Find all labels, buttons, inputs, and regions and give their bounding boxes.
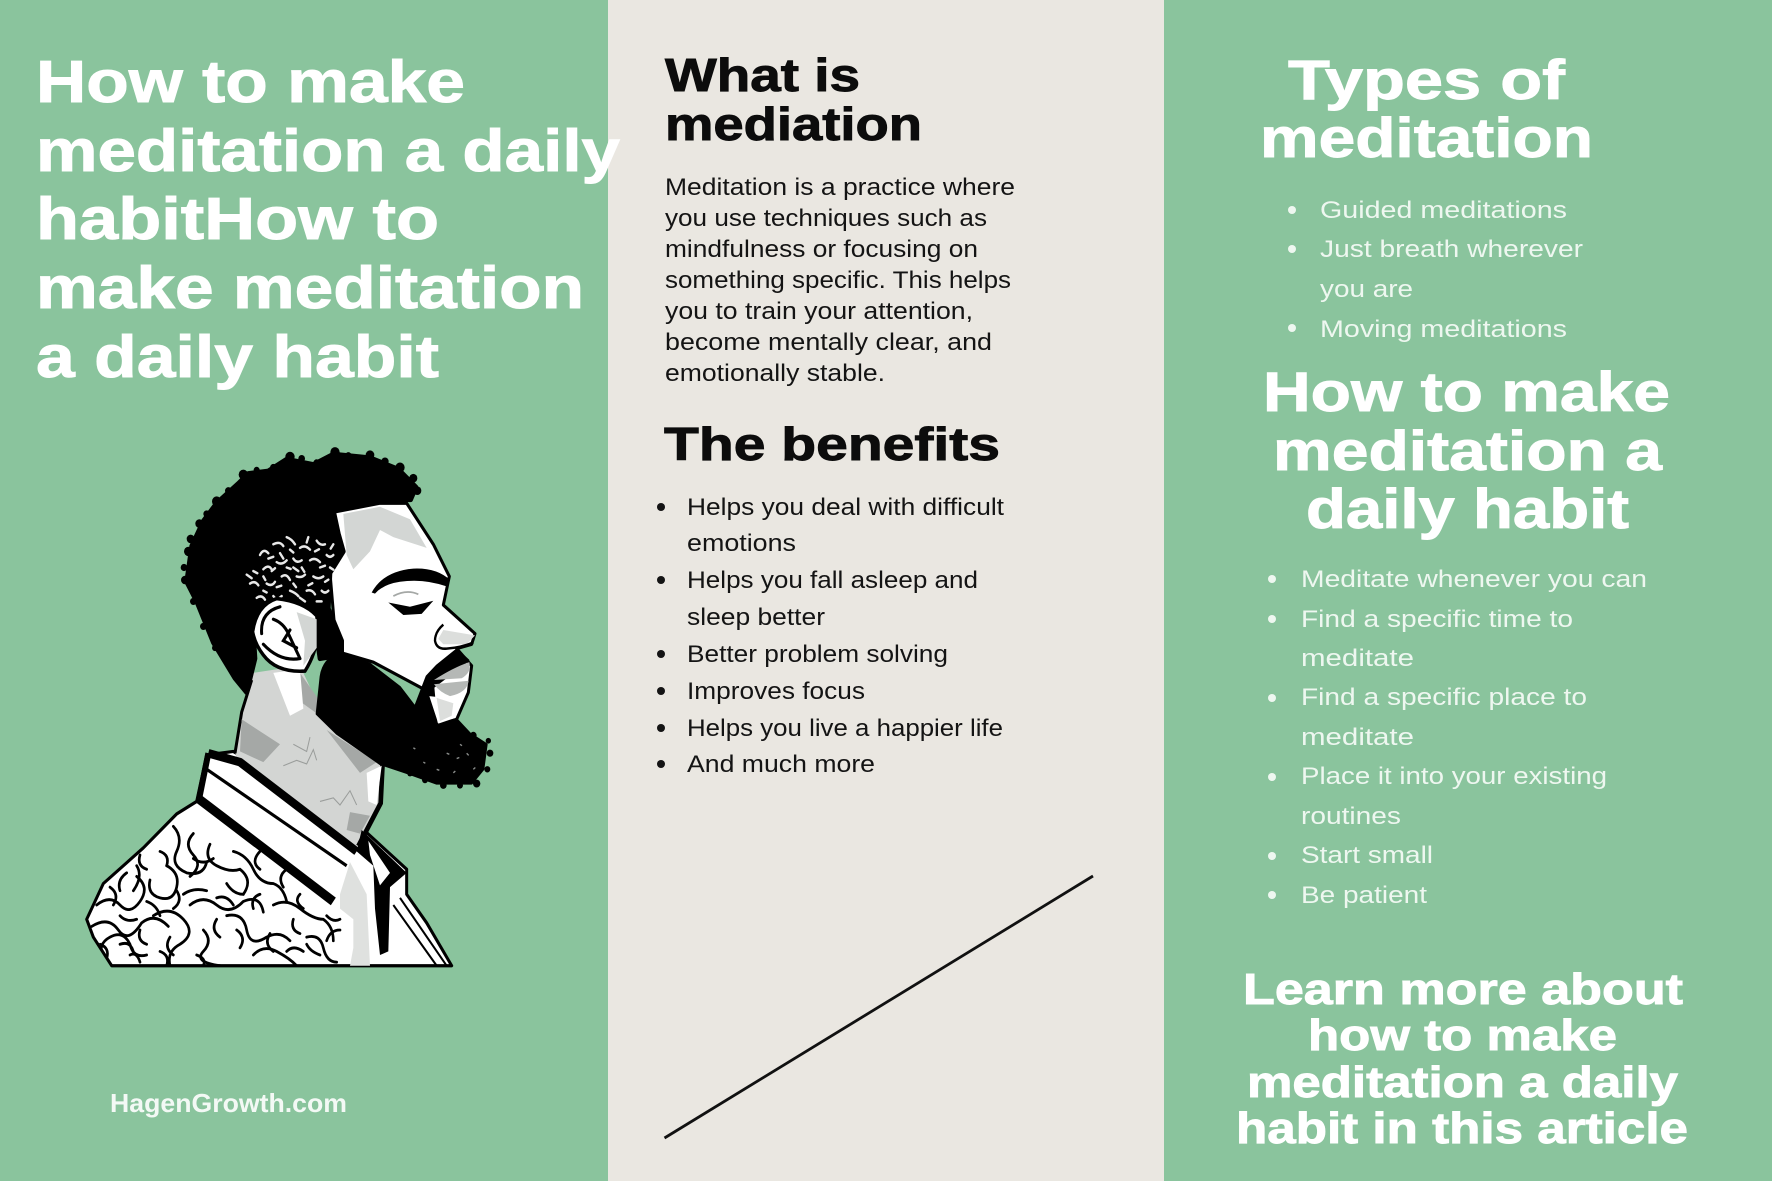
right shoulder lines (393, 898, 447, 966)
neck (235, 666, 382, 846)
heading: what is mediation: mediation (665, 98, 922, 150)
title: make meditation (36, 255, 584, 321)
ear shading (297, 612, 317, 666)
heading: what is mediation (665, 49, 922, 150)
shirt body (87, 751, 452, 966)
paragraph: what is meditation (665, 174, 1015, 387)
paragraph: what is meditation: become mentally clear, and (665, 329, 992, 356)
paragraph: what is meditation: emotionally stable. (665, 360, 885, 387)
title (36, 49, 620, 390)
paragraph: what is meditation: you use techniques such as (665, 205, 987, 232)
heading: types of meditation: meditation (1260, 106, 1593, 169)
list: how to make it a habit: Start small (1301, 842, 1433, 869)
list: types of meditation: Just breath wherever (1320, 236, 1583, 263)
call to action: meditation a daily (1247, 1058, 1679, 1107)
shirt pattern (92, 826, 340, 966)
title: habitHow to (36, 186, 439, 252)
list: how to make it a habit: routines (1301, 803, 1401, 830)
ear (253, 599, 318, 671)
chin patch (429, 695, 459, 724)
ear inner lines (262, 607, 300, 659)
collar outer stripe (198, 799, 333, 901)
heading: types of meditation: Types of (1288, 48, 1565, 111)
paragraph: what is meditation: mindfulness or focusing on (665, 236, 978, 263)
title: How to make (36, 49, 465, 115)
lips (434, 662, 470, 696)
beard texture (413, 744, 475, 773)
neck back outline (235, 680, 252, 753)
paragraph: what is meditation: something specific. This helps (665, 267, 1011, 294)
panel: centre cream background (608, 0, 1164, 1181)
list: benefits: Helps you fall asleep and (687, 567, 978, 594)
heading: how to make meditation a daily habit: How to make (1263, 360, 1670, 423)
list: how to make it a habit: meditate (1301, 724, 1414, 751)
list: how to make it a habit: Place it into your existing (1301, 763, 1607, 790)
chin shading (437, 698, 453, 721)
heading: the benefits: The benefits (664, 418, 1000, 470)
paragraph: what is meditation: you to train your attention, (665, 298, 973, 325)
forehead shading (343, 507, 427, 569)
title: meditation a daily (36, 118, 620, 184)
hair (187, 454, 416, 692)
list: types of meditation (1288, 197, 1583, 343)
list: benefits: And much more (687, 751, 875, 778)
call to action: how to make (1308, 1011, 1617, 1060)
diagonal line (664, 876, 1093, 1138)
list: benefits (657, 494, 1004, 778)
hair tufts (181, 447, 421, 651)
list: how to make it a habit: Meditate whenever you can (1301, 566, 1647, 593)
heading: what is mediation: What is (665, 49, 860, 101)
list: benefits: emotions (687, 530, 796, 557)
illustration: meditating man in profile (87, 447, 493, 966)
paragraph: what is meditation: Meditation is a practice where (665, 174, 1015, 201)
heading: how to make meditation a daily habit: daily habit (1306, 477, 1629, 540)
list: how to make it a habit: Be patient (1301, 882, 1427, 909)
placket dark band (357, 830, 407, 955)
collar thin stripe (207, 769, 347, 866)
list: how to make it a habit: Find a specific time to (1301, 606, 1573, 633)
collar tip white (368, 841, 390, 885)
nose shading (438, 630, 475, 644)
list: types of meditation: Moving meditations (1320, 316, 1567, 343)
closed eye (388, 601, 433, 615)
nose line (435, 625, 473, 649)
neck highlights (273, 669, 382, 805)
eyelid shading (393, 592, 418, 596)
neck fine lines (283, 737, 357, 805)
list: types of meditation: you are (1320, 276, 1413, 303)
list: how to make it a habit: Find a specific place to (1301, 684, 1587, 711)
list: how to make it a habit (1268, 566, 1647, 909)
collar left edge (199, 753, 208, 798)
panel: right green background (1164, 0, 1772, 1181)
shirt placket shade (340, 862, 370, 966)
beard tufts (407, 732, 493, 789)
neck front outline (358, 762, 383, 846)
face (330, 503, 475, 725)
list: benefits: Better problem solving (687, 641, 948, 668)
call to action: habit in this article (1236, 1104, 1688, 1153)
list: how to make it a habit: meditate (1301, 645, 1414, 672)
call to action (1236, 965, 1688, 1153)
neck shading (240, 673, 377, 834)
panel: left green background (0, 0, 608, 1181)
list: benefits: sleep better (687, 604, 825, 631)
collar inner band (208, 753, 357, 851)
site link: HagenGrowth.com (110, 1088, 347, 1118)
beard (317, 650, 487, 784)
curly fade texture (247, 537, 333, 601)
heading: types of meditation (1260, 48, 1593, 169)
list: benefits: Helps you live a happier life (687, 715, 1003, 742)
list: benefits: Improves focus (687, 678, 865, 705)
list: benefits: Helps you deal with difficult (687, 494, 1004, 521)
list: types of meditation: Guided meditations (1320, 197, 1567, 224)
heading: how to make meditation a daily habit: meditation a (1273, 419, 1663, 482)
call to action: Learn more about (1243, 965, 1683, 1014)
title: a daily habit (36, 324, 439, 390)
eyebrow (372, 568, 450, 594)
heading: how to make meditation a daily habit (1263, 360, 1670, 540)
